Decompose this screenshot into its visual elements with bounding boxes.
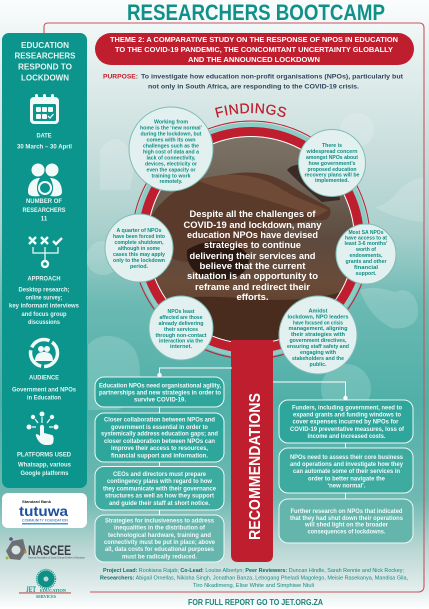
finding bubble: forced shutdown: only to the lockdown: [113, 258, 165, 264]
audience text: [12, 374, 77, 402]
recommendation: closer collaboration: improve their access to resources,: [111, 445, 208, 452]
finding bubble: crisis management: have focused on crisis: [293, 320, 343, 326]
finding bubble: crisis management: public.: [310, 362, 327, 368]
finding bubble: widespread concern: amongst NPOs about: [306, 155, 358, 161]
date: 30 March – 30 April: [17, 144, 72, 150]
finding bubble: working from home: lack of connectivity,: [146, 155, 196, 161]
number of researchers: NUMBER OF: [26, 198, 62, 205]
credits: Researchers: Abigail Ornellas, Nikisha Singh, Jonathan Banza, Lebogang Pheladi Magolego, Meisie Rasekanya, Mandisa Gila,: [100, 576, 408, 582]
platforms text: [17, 452, 72, 477]
panel: theme banner: AND THE ANNOUNCED LOCKDOWN: [188, 55, 320, 64]
logo: NASCEE: [6, 537, 85, 560]
icon: researchers: [28, 164, 62, 196]
approach text: [9, 276, 80, 326]
number of researchers: 11: [41, 216, 48, 222]
finding bubble: working from home: even the capacity or: [146, 167, 196, 173]
purpose: To investigate how education non-profit organisations (NPOs), particularly but: [141, 74, 404, 80]
central message: education NPOs have devised: [187, 230, 318, 241]
recommendation: closer collaboration: systemically address education gaps; and: [101, 431, 218, 438]
logo: JET: [19, 570, 71, 599]
date: DATE: [36, 132, 52, 140]
purpose: PURPOSE:: [103, 74, 138, 80]
finding bubble: working from home: devices, electricity or: [145, 161, 197, 167]
approach text: key informant interviews: [9, 302, 80, 310]
recommendation: inclusiveness: Strategies for inclusiveness to address: [105, 517, 214, 524]
recommendation: contingency plans: they communicate with their governance: [103, 485, 216, 492]
finding bubble: working from home: high cost of data and a: [143, 149, 199, 155]
central message: delivering their services and: [190, 251, 316, 262]
approach text: APPROACH: [28, 276, 60, 282]
icon: audience: [30, 340, 58, 366]
recommendation: funders: income and increased costs.: [308, 433, 386, 440]
logo: JET: SERVICES: [36, 595, 56, 599]
recommendation: contingency plans: and guide their staff at short notice.: [109, 500, 210, 507]
date: [17, 132, 72, 150]
finding bubble: widespread concern: implemented.: [315, 178, 350, 184]
recommendation: core business: order to better navigate the: [308, 475, 385, 482]
finding bubble: forced shutdown: A quarter of NPOs: [116, 228, 162, 234]
finding bubble: forced shutdown: have been forced into: [113, 234, 165, 240]
finding bubble: working from home: home is the ‘new normal’: [140, 125, 203, 131]
report link: FOR FULL REPORT GO TO JET.ORG.ZA: [188, 598, 323, 607]
sidebar heading: [14, 41, 76, 82]
finding bubble: reserves: support.: [356, 271, 377, 277]
recommendation: organisational agility: partnerships and new strategies in order to: [99, 389, 221, 396]
finding bubble: crisis management: government directives,: [290, 338, 347, 344]
recommendations bar: [231, 340, 273, 562]
finding bubble: crisis management: lockdown, NPO leaders: [288, 314, 349, 320]
recommendation: inclusiveness: connectivity must be put in place; above: [104, 539, 215, 546]
finding bubble: working from home: training to work: [152, 173, 191, 179]
finding bubble: forced shutdown: although in some: [118, 246, 160, 252]
credits: Project Lead: Rookiana Rajab; Co-Lead: Louise Albertyn; Peer Reviewers: Duncan Hindle, Sarah Rennie and Nick Rockey;: [103, 568, 404, 574]
sidebar heading: RESPOND TO: [18, 62, 73, 72]
finding bubble: least affected: NPOs least: [168, 309, 195, 315]
finding bubble: working from home: [129, 107, 213, 191]
panel: sidebar: [2, 33, 87, 488]
finding bubble: forced shutdown: [105, 214, 173, 282]
connectors: [160, 368, 346, 515]
credits: [100, 568, 408, 589]
recommendation: closer collaboration: financial support and information.: [111, 452, 208, 459]
panel: theme banner: [95, 33, 414, 65]
central message: believe that the current: [200, 261, 306, 272]
finding bubble: crisis management: ensuring staff safety and: [287, 344, 349, 350]
recommendation: contingency plans: [95, 466, 224, 510]
recommendation: core business: and operations and investigate how they: [290, 461, 403, 468]
finding bubble: crisis management: their strategies with: [291, 332, 345, 338]
recommendation: funders: COVID-19 preventative measures, loss of: [290, 426, 405, 433]
finding bubble: crisis management: [279, 296, 357, 374]
approach text: and focus group: [22, 311, 67, 318]
finding bubble: reserves: have access to at: [345, 236, 387, 242]
logo: tutuwa: Standard Bank: [22, 499, 52, 504]
panel: theme banner: TO THE COVID-19 PANDEMIC, THE CONCOMITANT UNCERTAINTY GLOBALLY: [115, 45, 393, 54]
finding bubble: crisis management: management, aligning: [288, 326, 348, 332]
finding bubble: reserves: worth of: [355, 247, 376, 253]
finding bubble: reserves: Most SA NPOs: [348, 230, 384, 236]
finding bubble: working from home: during the lockdown, but: [140, 131, 202, 137]
finding bubble: working from home: challenges such as the: [143, 143, 199, 149]
recommendation: funders: Funders, including government, need to: [292, 404, 402, 411]
recommendation: further research: that they had shut down their operations: [290, 515, 403, 522]
recommendation: funders: [279, 400, 413, 443]
recommendation: funders: expand grants and funding windows to: [293, 411, 401, 418]
sidebar heading: LOCKDOWN: [21, 74, 69, 82]
recommendation: core business: ‘new normal’.: [328, 482, 366, 489]
finding bubble: reserves: endowments,: [350, 253, 383, 259]
central message: strategies to continue: [204, 240, 301, 251]
logo: tutuwa: COMMUNITY FOUNDATION: [22, 518, 68, 522]
recommendation: contingency plans: contingency plans with regard to how: [107, 478, 212, 485]
finding bubble: widespread concern: proposed education: [308, 167, 356, 173]
finding bubble: crisis management: stakeholders and the: [292, 356, 344, 362]
central message: efforts.: [236, 292, 268, 303]
photo: hands: [152, 164, 340, 341]
finding bubble: least affected: interaction via the: [159, 339, 203, 345]
finding bubble: forced shutdown: period.: [130, 264, 149, 270]
finding bubble: crisis management: Amidst: [308, 309, 328, 315]
recommendation: inclusiveness: inequalities in the distribution of: [114, 524, 206, 531]
audience text: Government and NPOs: [12, 386, 77, 394]
approach text: online survey;: [26, 294, 62, 302]
platforms text: Whatsapp, various: [18, 462, 72, 468]
purpose: not only in South Africa, are responding to the COVID-19 crisis.: [148, 84, 359, 90]
logo: NASCEE: National Association of Social Change Entities in Education: [28, 556, 85, 560]
logo: NASCEE: NASCEE: [28, 543, 71, 558]
audience text: AUDIENCE: [29, 374, 59, 382]
finding bubble: working from home: Working from: [154, 119, 188, 125]
recommendation: contingency plans: structures as well as how they support: [105, 492, 215, 499]
connector dots: [157, 373, 348, 400]
platforms text: PLATFORMS USED: [17, 452, 72, 458]
decorative blobs: [86, 113, 424, 414]
recommendation: organisational agility: Education NPOs need organisational agility,: [99, 382, 221, 389]
logo: tutuwa: [2, 493, 87, 528]
recommendation: closer collaboration: [95, 413, 224, 462]
central message: situation is an opportunity to: [187, 271, 318, 282]
finding bubble: least affected: through non-contact: [156, 333, 207, 339]
logo: JET: JET: [26, 585, 36, 594]
finding bubble: reserves: grants and other: [346, 259, 386, 265]
recommendation: closer collaboration: closer collaboration between NPOs can: [104, 438, 215, 445]
recommendation: further research: Further research on NPOs that indicated: [290, 508, 403, 515]
sidebar heading: RESEARCHERS: [14, 52, 76, 60]
number of researchers: RESEARCHERS: [22, 207, 66, 214]
recommendation: core business: can automate some of their services in: [293, 468, 400, 475]
finding bubble: reserves: financial: [354, 265, 379, 271]
finding bubble: working from home: remotely.: [160, 179, 183, 185]
central message: COVID-19 and lockdown, many: [184, 220, 322, 231]
number of researchers: [22, 198, 66, 222]
recommendation: organisational agility: [95, 377, 224, 407]
recommendation: core business: NPOs need to assess their core business: [290, 454, 403, 461]
recommendation: closer collaboration: Closer collaboration between NPOs and: [104, 416, 215, 424]
recommendation: core business: [279, 448, 413, 493]
finding bubble: least affected: their services: [164, 327, 198, 333]
icon: platforms: [26, 412, 58, 445]
finding bubble: forced shutdown: cases this may apply: [113, 252, 165, 258]
approach text: discussions: [28, 319, 61, 326]
finding bubble: widespread concern: widespread concern: [305, 149, 358, 155]
finding bubble: least affected: already delivering: [158, 321, 204, 327]
finding bubble: widespread concern: [298, 130, 366, 196]
central message: reframe and redirect their: [195, 282, 310, 293]
panel: theme banner: THEME 2: A COMPARATIVE STUDY ON THE RESPONSE OF NPOS IN EDUCATION: [110, 35, 398, 44]
credits: Tiro Nkadimeng, Elise White and Simphiwe Ntuli: [193, 583, 314, 589]
recommendation: inclusiveness: [95, 515, 224, 562]
approach text: Desktop research;: [18, 286, 70, 294]
icon: approach: [29, 237, 62, 267]
recommendation: closer collaboration: government is essential in order to: [111, 424, 208, 431]
central message: Despite all the challenges of: [190, 209, 316, 220]
logo: tutuwa: tutuwa: [19, 503, 68, 519]
recommendation: inclusiveness: all, data costs for educational purposes: [105, 546, 214, 553]
central message: [184, 209, 322, 303]
finding bubble: widespread concern: There is: [322, 143, 342, 149]
findings ring and photo: [132, 121, 370, 359]
audience text: in Education: [27, 394, 61, 402]
finding bubble: forced shutdown: complete shutdown,: [114, 240, 164, 246]
purpose: [103, 74, 404, 90]
finding bubble: widespread concern: recovery plans will be: [304, 172, 360, 178]
recommendation: inclusiveness: technological hardware, training and: [108, 532, 211, 539]
recommendation: further research: will shed light on the broader: [304, 522, 389, 529]
platforms text: Google platforms: [20, 470, 69, 477]
recommendation: funders: cover expenses incurred by NPOs for: [292, 418, 399, 425]
recommendation: organisational agility: survive COVID-19.: [134, 396, 186, 403]
findings heading: FINDINGS: [215, 103, 286, 118]
recommendation: contingency plans: CEOs and directors must prepare: [113, 471, 206, 478]
finding bubble: least affected: affected are those: [160, 315, 203, 321]
logo: JET: EDUCATION: [40, 589, 66, 593]
recommendation: further research: [279, 499, 413, 543]
title: RESEARCHERS BOOTCAMP: [127, 0, 385, 25]
recommendations bar: RECOMMENDATIONS: [247, 393, 264, 540]
finding bubble: reserves: [336, 224, 396, 284]
finding bubble: working from home: comes with its own: [146, 137, 196, 143]
icon: calendar: [30, 94, 59, 124]
recommendation: inclusiveness: must be radically reduced.: [122, 553, 197, 560]
finding bubble: least affected: internet.: [170, 344, 193, 350]
finding bubble: reserves: least 3-6 months’: [344, 241, 388, 247]
finding bubble: widespread concern: how government’s: [308, 161, 356, 167]
finding bubble: least affected: [149, 296, 213, 360]
finding bubble: crisis management: engaging with: [300, 350, 336, 356]
sidebar heading: EDUCATION: [21, 41, 69, 50]
recommendation: further research: consequences of lockdowns.: [308, 528, 386, 535]
